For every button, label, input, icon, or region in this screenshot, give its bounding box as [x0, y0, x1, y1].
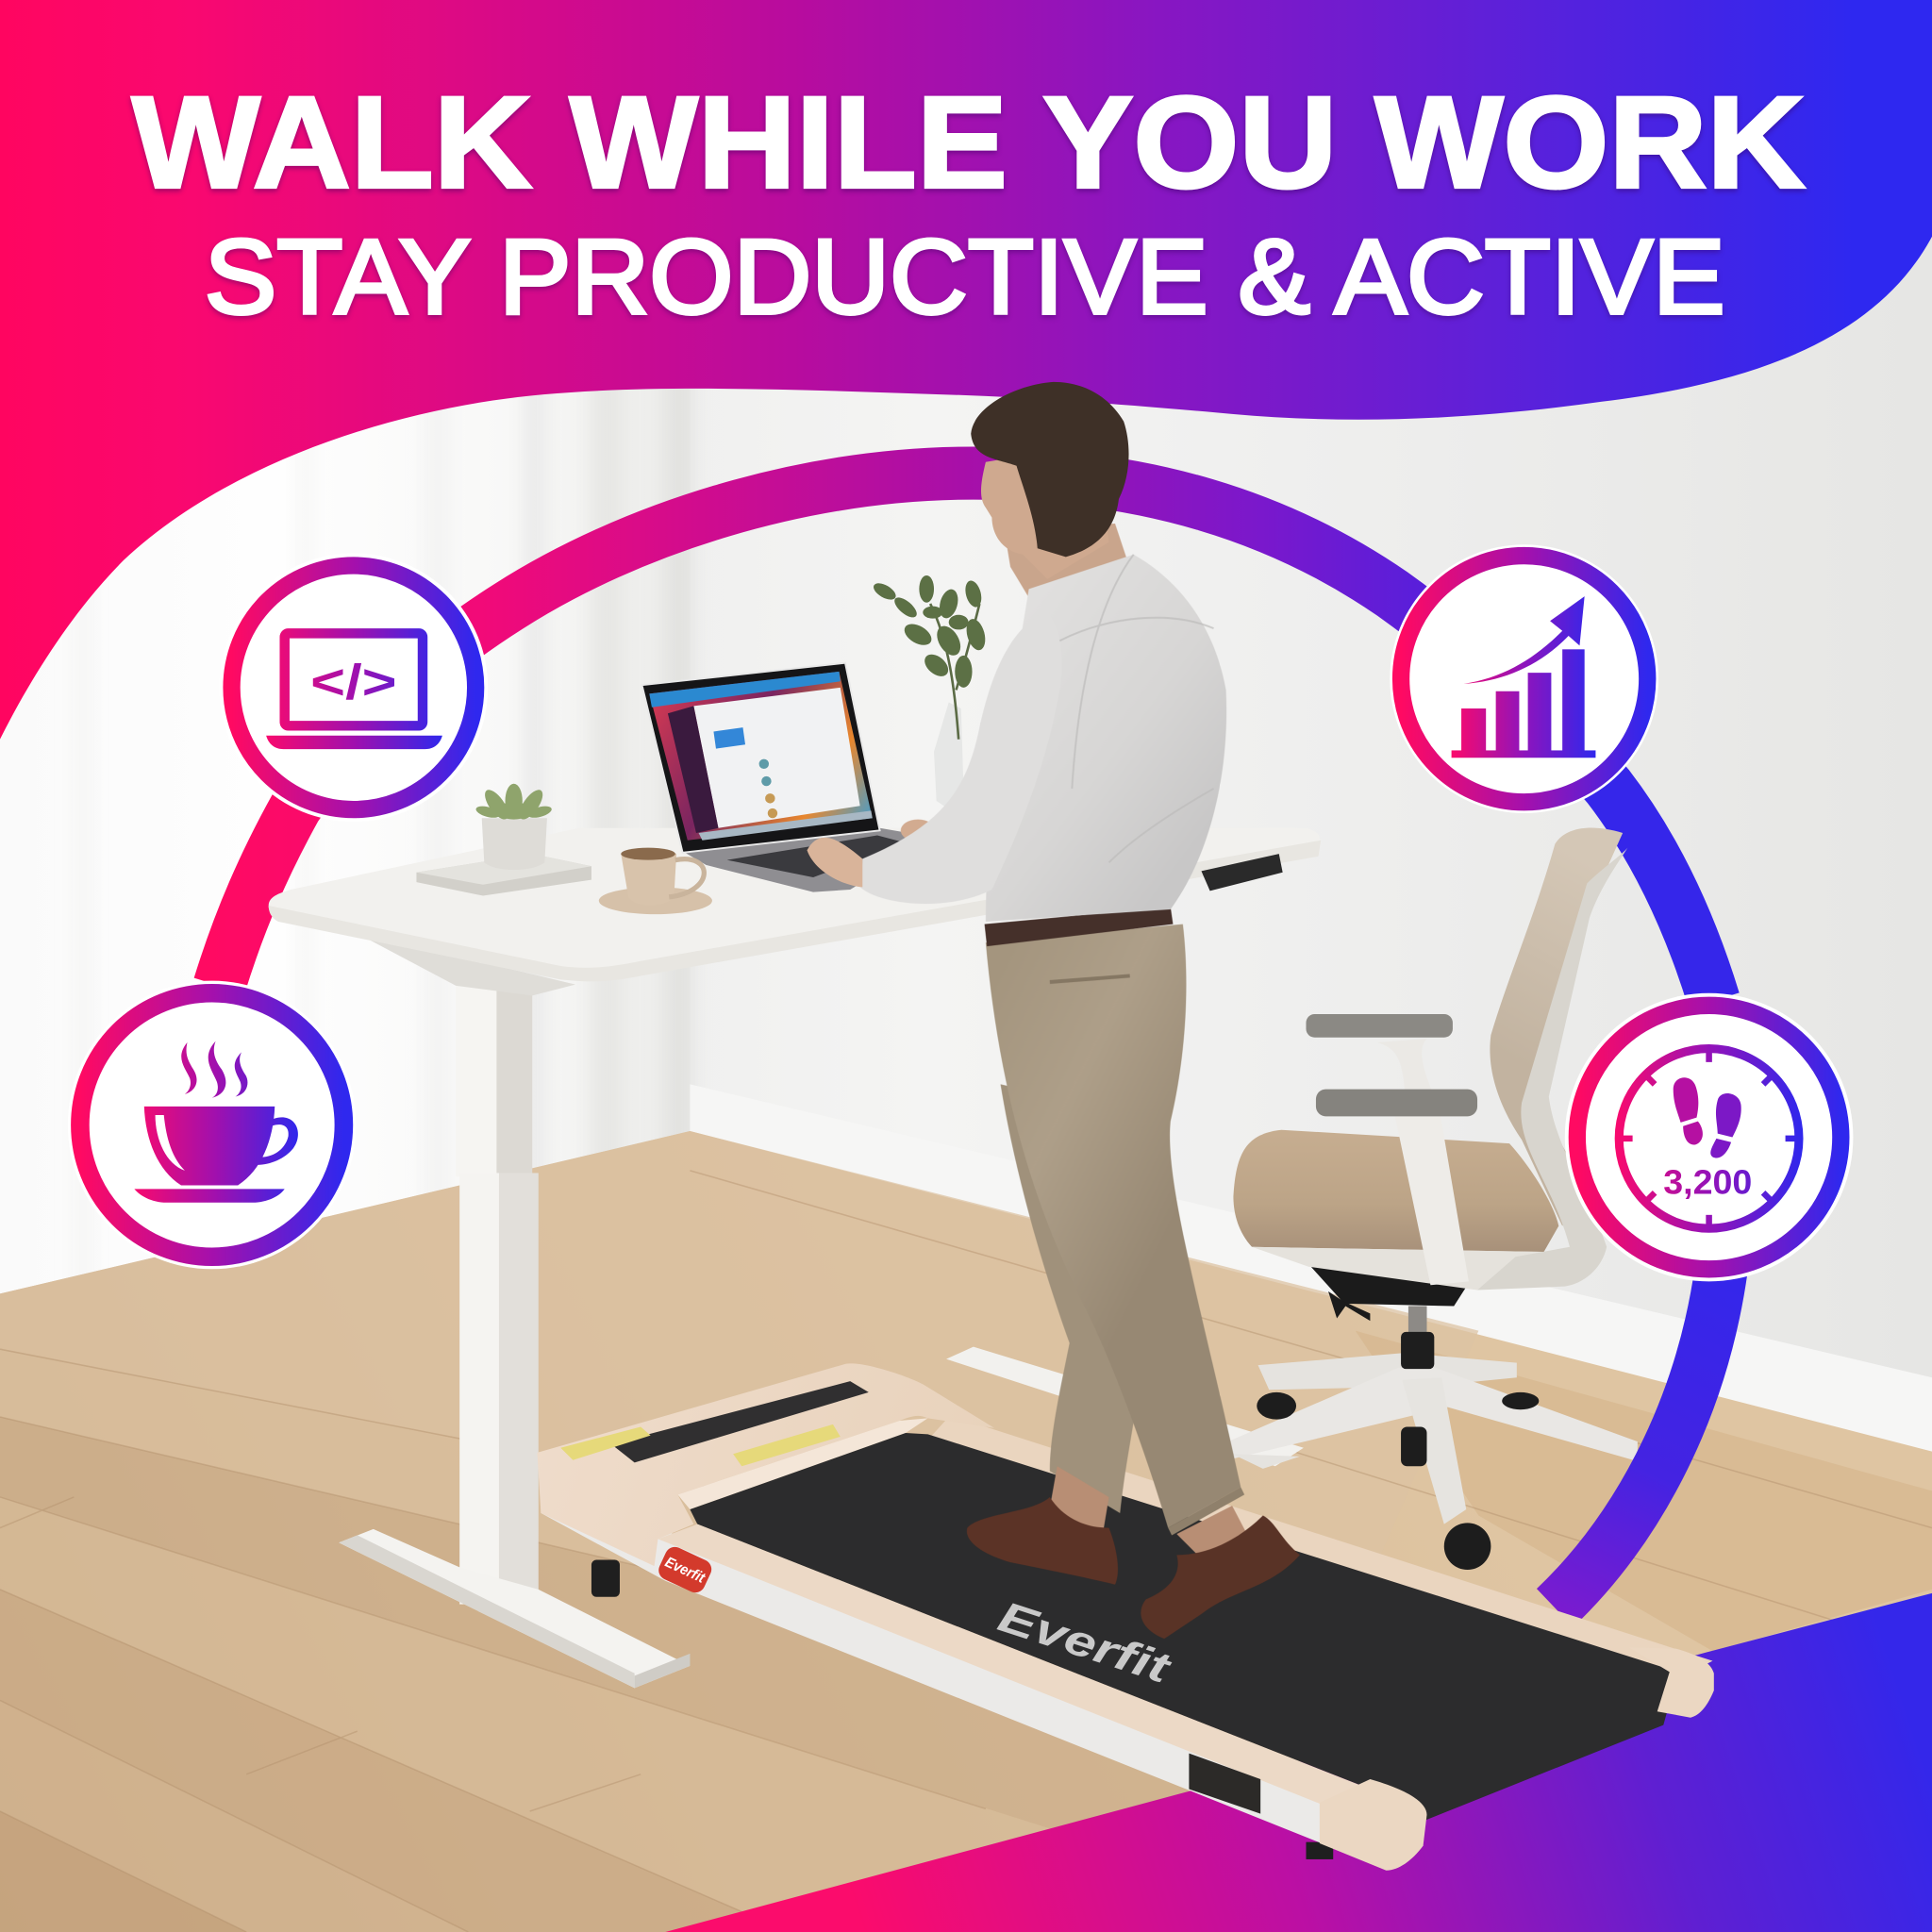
dial: [1619, 1049, 1799, 1228]
office chair: [1223, 828, 1638, 1570]
front leg: [986, 924, 1241, 1528]
laptop: [641, 663, 937, 892]
treadmill rear end cap: [1629, 1647, 1714, 1718]
shirt torso: [986, 555, 1226, 922]
treadmill head inner wall: [677, 1418, 928, 1509]
connecting arc (lower): [1555, 1269, 1722, 1607]
belt: [985, 907, 1173, 946]
chair seat pan: [1252, 1247, 1544, 1291]
baseboard: [690, 1084, 1932, 1460]
hand on keyboard: [808, 838, 862, 887]
icon badge: coffee cup: [68, 981, 356, 1269]
far hand: [901, 820, 935, 841]
man walking at desk: [808, 382, 1300, 1639]
treadmill display: [611, 1381, 869, 1462]
desk control panel: [1201, 854, 1283, 891]
treadmill data label: [1189, 1754, 1260, 1814]
treadmill far rail: [924, 1417, 1713, 1678]
walking treadmill: [537, 1363, 1714, 1871]
desk rear foot: [946, 1347, 1304, 1466]
chair frame: [1477, 848, 1627, 1291]
treadmill front end cap: [1320, 1779, 1426, 1871]
head: hair: [971, 382, 1129, 557]
bottom corner gradient wedge: [665, 1593, 1932, 1932]
treadmill head housing: [537, 1363, 994, 1566]
back leg: [1001, 1084, 1141, 1513]
chair base: [1223, 1353, 1638, 1524]
treadmill belt logo: Everfit: [992, 1592, 1177, 1693]
desk underside frame: [354, 931, 575, 995]
laptop icon: </>: [310, 656, 397, 710]
cup icon: [134, 1041, 298, 1203]
step count: 3,200: [1663, 1163, 1752, 1202]
chart icon: [1452, 596, 1595, 758]
wood floor: [0, 1131, 1932, 1932]
treadmill front rail: [658, 1524, 1370, 1805]
icon badge: laptop with code: [219, 553, 488, 822]
pocket detail: [1050, 975, 1130, 982]
chair mechanism: [1309, 1265, 1474, 1321]
laptop base: [685, 828, 937, 892]
coffee cup on saucer: [599, 848, 712, 914]
laptop icon: [266, 633, 442, 749]
neck: [1004, 524, 1134, 597]
icon badge: growth chart: [1390, 544, 1658, 813]
room background: window curtains: [0, 370, 692, 1306]
treadmill brand badge: [656, 1543, 715, 1596]
desk top surface: [269, 828, 1320, 972]
main headline: WALK WHILE YOU WORK: [132, 71, 1805, 216]
desk leg column: [456, 979, 539, 1605]
desk front edge: [269, 841, 1321, 981]
chair piston: [1401, 1306, 1434, 1369]
treadmill feet: [591, 1560, 1333, 1859]
sub headline: STAY PRODUCTIVE & ACTIVE: [205, 217, 1725, 336]
chair backrest mesh: [1490, 828, 1623, 1226]
head: face: [981, 443, 1109, 579]
plant in glass vase: [871, 575, 989, 810]
desk front foot: [339, 1529, 690, 1688]
laptop screen: [641, 663, 880, 853]
chair seat cushion: [1233, 1130, 1558, 1252]
front leg cuff: [1168, 1487, 1244, 1535]
front shoe: [1141, 1506, 1300, 1639]
treadmill running belt: [690, 1433, 1678, 1824]
chair casters: [1257, 1392, 1539, 1570]
treadmill side panel: [541, 1454, 1324, 1844]
standing desk: [269, 828, 1321, 1688]
chair front armrest: [1316, 1090, 1477, 1285]
top header banner: [0, 0, 1932, 740]
shirt folds: [1059, 555, 1214, 862]
small succulent on books: [416, 784, 591, 896]
icon badge: step counter: [1565, 993, 1853, 1281]
treadmill brand badge: Everfit: [662, 1555, 708, 1587]
connecting arc (upper): [219, 474, 1714, 1001]
chair back armrest: [1306, 1014, 1453, 1091]
shirt sleeve: [860, 610, 1062, 904]
footprints: [1674, 1077, 1741, 1158]
back leg ankle and shoe: [967, 1466, 1118, 1585]
treadmill warning labels: [560, 1424, 841, 1466]
